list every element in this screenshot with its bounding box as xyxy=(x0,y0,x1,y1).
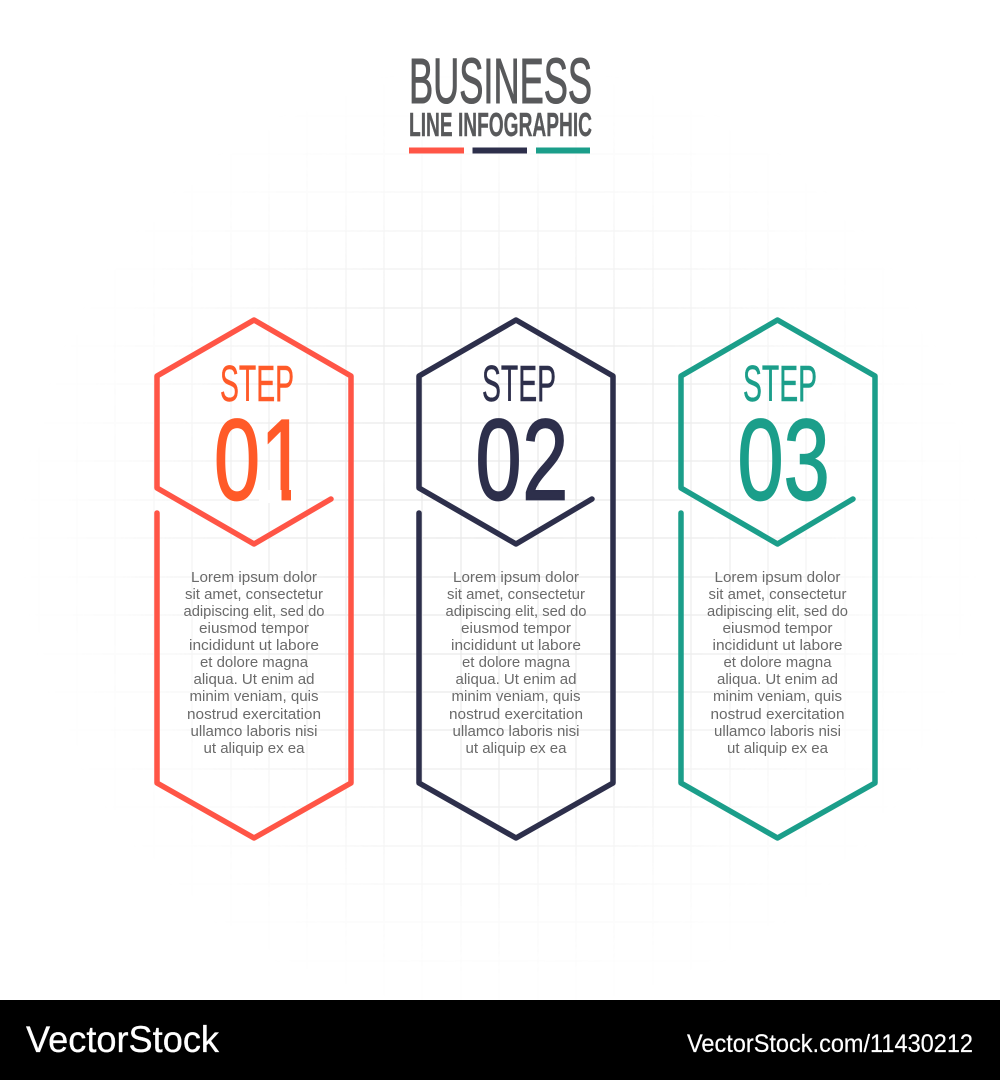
text block: step 01: aliqua. Ut enim ad xyxy=(194,671,314,688)
label: step 01: STEP xyxy=(220,355,294,412)
text block: step 02: sit amet, consectetur xyxy=(447,586,585,603)
text block: step 01: Lorem ipsum dolor xyxy=(191,569,317,586)
text block: step 03: et dolore magna xyxy=(724,654,832,671)
text block: step 01: ullamco laboris nisi xyxy=(190,723,318,740)
text block: step 03: eiusmod tempor xyxy=(722,620,832,637)
text block: step 03: adipiscing elit, sed do xyxy=(707,603,848,620)
hexagon outline: step 03 xyxy=(681,320,875,838)
label: step 02: STEP xyxy=(482,355,556,412)
footer bar xyxy=(0,1000,1000,1080)
text block: step 01: ut aliquip ex ea xyxy=(204,740,305,757)
text block: step 03 xyxy=(707,569,848,757)
text block: step 01: minim veniam, quis xyxy=(190,688,318,705)
text block: step 02: ut aliquip ex ea xyxy=(466,740,567,757)
text block: step 02: aliqua. Ut enim ad xyxy=(456,671,576,688)
text block: step 03: Lorem ipsum dolor xyxy=(714,569,841,586)
title xyxy=(409,45,592,154)
text block: step 03: incididunt ut labore xyxy=(712,637,842,654)
text block: step 03: ut aliquip ex ea xyxy=(727,740,829,757)
text block: step 02: nostrud exercitation xyxy=(449,706,583,723)
text block: step 02: et dolore magna xyxy=(462,654,571,671)
text block: step 02: ullamco laboris nisi xyxy=(452,723,580,740)
text block: step 01: adipiscing elit, sed do xyxy=(184,603,324,620)
footer image id: VectorStock.com/11430212 xyxy=(687,1030,973,1058)
text block: step 02: adipiscing elit, sed do xyxy=(446,603,586,620)
text block: step 01: incididunt ut labore xyxy=(189,637,319,654)
panel: step 02 xyxy=(419,320,613,838)
title line: Business: BUSINESS xyxy=(409,45,592,117)
text block: step 01: nostrud exercitation xyxy=(187,706,321,723)
panel: step 03 xyxy=(681,320,875,838)
text block: step 03: ullamco laboris nisi xyxy=(714,723,841,740)
text block: step 02 xyxy=(446,569,586,757)
text block: step 02: Lorem ipsum dolor xyxy=(453,569,579,586)
number: 03: 03 xyxy=(738,396,830,525)
label: step 03: STEP xyxy=(743,355,817,412)
subtitle: Line Infographic: LINE INFOGRAPHIC xyxy=(409,106,592,143)
text block: step 03: sit amet, consectetur xyxy=(708,586,846,603)
text block: step 01: eiusmod tempor xyxy=(199,620,309,637)
text block: step 01 xyxy=(184,569,324,757)
text block: step 03: minim veniam, quis xyxy=(713,688,842,705)
text block: step 03: nostrud exercitation xyxy=(710,706,844,723)
number: 02: 02 xyxy=(476,396,568,525)
title colour bars xyxy=(409,148,590,154)
number: 01: 01 xyxy=(214,396,306,525)
hexagon outline: step 02 xyxy=(419,320,613,838)
text block: step 01: et dolore magna xyxy=(200,654,309,671)
panel: step 01 xyxy=(157,320,351,838)
text block: step 03: aliqua. Ut enim ad xyxy=(717,671,838,688)
text block: step 02: incididunt ut labore xyxy=(451,637,581,654)
text block: step 02: minim veniam, quis xyxy=(452,688,580,705)
text block: step 01: sit amet, consectetur xyxy=(185,586,323,603)
text block: step 02: eiusmod tempor xyxy=(461,620,571,637)
hexagon outline: step 01 xyxy=(157,320,351,838)
footer logo text: VectorStock xyxy=(26,1019,219,1060)
